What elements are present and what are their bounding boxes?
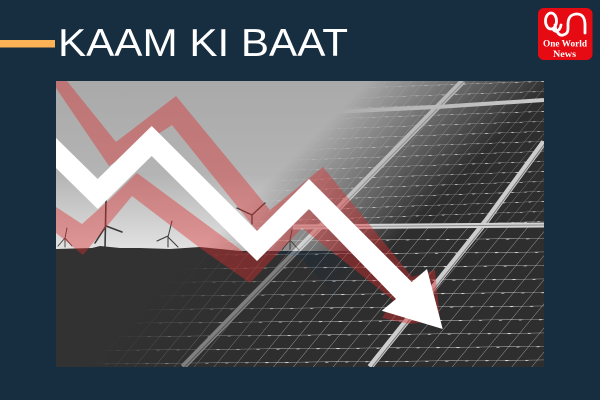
panel frame rails xyxy=(183,81,546,367)
photo panel: wind turbines and solar panels xyxy=(56,81,546,367)
logo: One World News xyxy=(538,8,592,60)
white downward arrow xyxy=(56,126,443,329)
near cell grid xyxy=(56,226,544,367)
far cell grid xyxy=(248,81,544,226)
logo: One World News: One World xyxy=(543,38,587,48)
red shadow arrow xyxy=(56,81,440,324)
solar panels xyxy=(56,81,546,367)
panel surface xyxy=(218,81,544,367)
orange accent bar xyxy=(0,40,55,48)
wind turbines xyxy=(58,200,300,250)
sky xyxy=(56,81,544,251)
title: KAAM KI BAAT xyxy=(58,22,348,65)
logo: One World News: News xyxy=(553,49,577,59)
dark hill xyxy=(56,246,330,367)
